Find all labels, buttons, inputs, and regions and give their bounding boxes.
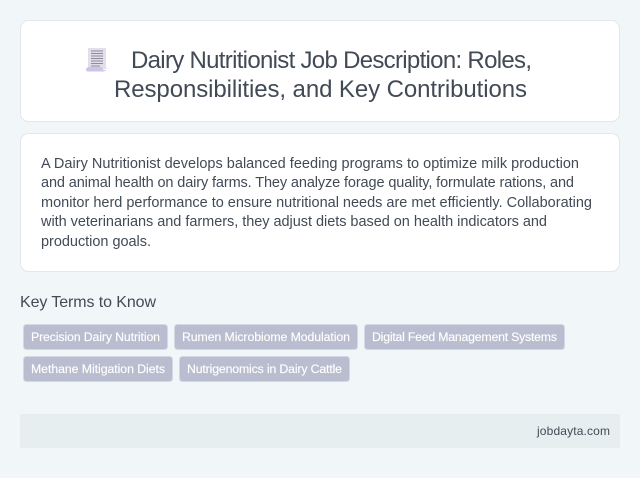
description text: A Dairy Nutritionist develops balanced feeding programs to optimize milk production	[41, 156, 579, 172]
title	[114, 47, 532, 103]
chip: methane mitigation diets: Methane Mitigation Diets	[31, 362, 165, 376]
chip: rumen microbiome modulation	[174, 324, 358, 350]
panel: job description	[20, 134, 620, 272]
chip: digital feed management systems: Digital Feed Management Systems	[372, 330, 557, 344]
title: Dairy Nutritionist Job Description: Roles,	[131, 47, 532, 74]
description text	[40, 156, 592, 250]
chip: nutrigenomics in dairy cattle	[180, 356, 350, 382]
icon: document scroll	[86, 48, 107, 72]
panel: title header	[20, 20, 620, 122]
footer bar: jobdayta.com	[536, 424, 610, 438]
chip: nutrigenomics in dairy cattle: Nutrigenomics in Dairy Cattle	[187, 362, 342, 376]
chip: digital feed management systems	[364, 324, 564, 350]
description text: production goals.	[41, 234, 151, 250]
description text: with veterinarians and farmers, they adjust diets based on health indicators and	[40, 214, 547, 230]
title: Responsibilities, and Key Contributions	[114, 76, 527, 103]
description text: and animal health on dairy farms. They analyze forage quality, formulate rations, and	[41, 175, 574, 191]
chip: precision dairy nutrition: Precision Dairy Nutrition	[31, 330, 160, 344]
heading: key terms: Key Terms to Know	[20, 294, 156, 311]
key term chips	[24, 324, 564, 382]
description text: monitor herd performance to ensure nutritional needs are met efficiently. Collaborating	[41, 195, 592, 211]
chip: methane mitigation diets	[24, 356, 172, 382]
footer bar	[20, 414, 620, 448]
chip: rumen microbiome modulation: Rumen Microbiome Modulation	[182, 330, 350, 344]
chip: precision dairy nutrition	[24, 324, 168, 350]
